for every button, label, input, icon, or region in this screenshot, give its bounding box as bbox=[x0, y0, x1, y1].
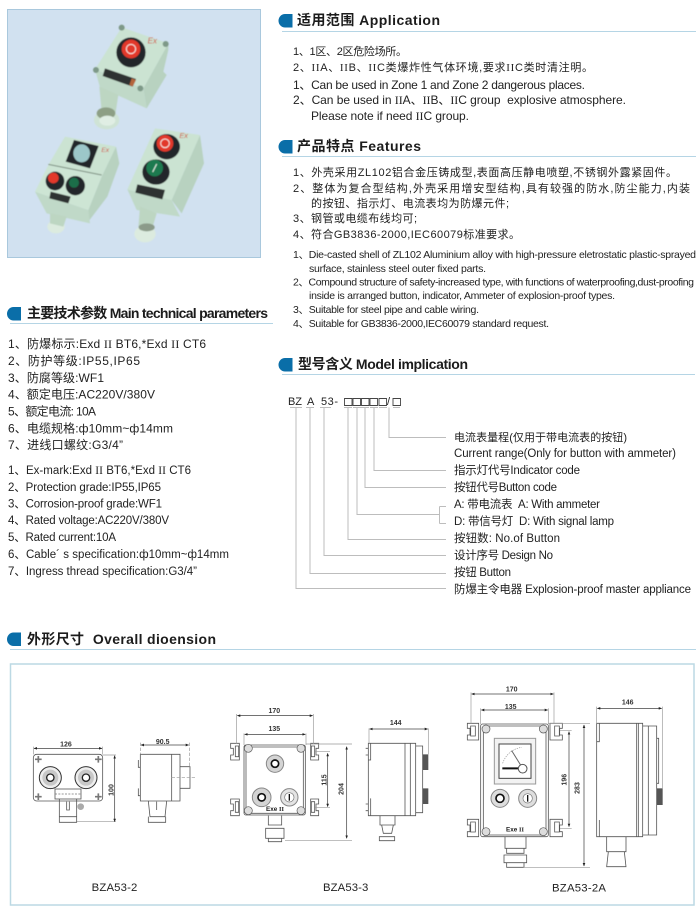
code labels: 防爆主令电器 Explosion-proof master appliance bbox=[454, 582, 691, 596]
front view: 170 bbox=[269, 708, 280, 715]
text block: parameters english: 7、Ingress thread specification:G3/4” bbox=[8, 566, 197, 578]
icon: double button enclosure: Ex bbox=[179, 131, 188, 140]
text block: parameters chinese: 7、进线口螺纹:G3/4” bbox=[8, 438, 123, 452]
front view: 170 bbox=[506, 687, 518, 694]
panel: product photo bbox=[8, 10, 260, 258]
code labels: 设计序号 Design No bbox=[454, 548, 553, 562]
icon: double button enclosure bbox=[127, 128, 204, 242]
side view: 146 bbox=[622, 699, 634, 706]
text block: parameters english: 2、Protection grade:IP55,IP65 bbox=[8, 482, 161, 494]
diagram: model code breakdown bbox=[288, 396, 691, 596]
drawing: BZA53-3 bbox=[231, 708, 428, 894]
model code bbox=[288, 396, 400, 408]
caption: BZA53-2 bbox=[92, 882, 137, 894]
side view: 90.5 bbox=[156, 739, 170, 746]
text block: features english: inside is arranged button, indicator, Ammeter of explosion-proof types. bbox=[309, 290, 615, 302]
text block: parameters english: 1、Ex-mark:Exd II BT6,*Exd II CT6 bbox=[8, 465, 191, 477]
front view bbox=[467, 687, 590, 867]
caption: BZA53-2A bbox=[552, 883, 606, 895]
text block: features chinese: 的按钮、指示灯、电流表均为防爆元件; bbox=[311, 196, 509, 210]
text block: parameters chinese: 6、电缆规格:ф10mm~ф14mm bbox=[8, 420, 173, 436]
text block: application list bbox=[293, 44, 626, 123]
text block: features english: 1、Die-casted shell of ZL102 Aluminium alloy with high-pressure eletrostatic plastic-sprayed bbox=[293, 249, 696, 261]
model code: BZ bbox=[288, 396, 302, 408]
heading: model implication bbox=[278, 356, 695, 374]
front view: Exe II bbox=[506, 826, 525, 833]
front view: 100 bbox=[109, 784, 116, 796]
side view bbox=[138, 739, 195, 822]
heading: main technical parameters: 主要技术参数 Main technical parameters bbox=[27, 305, 268, 321]
front view: Exe II bbox=[266, 806, 285, 813]
text block: parameters english: 6、Cable´ s specification:ф10mm~ф14mm bbox=[8, 549, 229, 561]
text block: features chinese bbox=[293, 165, 690, 241]
front view: 283 bbox=[574, 782, 581, 794]
code labels: Current range(Only for button with ammeter) bbox=[454, 448, 676, 460]
icon: single button enclosure: Ex bbox=[148, 36, 158, 45]
text block: application list: 2、IIA、IIB、IIC类爆炸性气体环境,要求IIC类时清注明。 bbox=[293, 60, 593, 74]
heading: overall dimension: 外形尺寸 Overall dioension bbox=[27, 631, 216, 647]
front view bbox=[231, 708, 352, 842]
icon: button enclosure with ammeter window: Ex bbox=[101, 147, 110, 154]
text block: features english bbox=[293, 249, 696, 330]
text block: application list: Please note if need IIC group. bbox=[311, 109, 469, 123]
code labels bbox=[454, 430, 691, 596]
text block: parameters chinese: 5、额定电流: 10A bbox=[8, 404, 96, 418]
text block: parameters english: 5、Rated current:10A bbox=[8, 532, 116, 544]
code labels: 电流表量程(仅用于带电流表的按钮) bbox=[454, 430, 627, 444]
icon: single button enclosure bbox=[93, 25, 169, 129]
panel: dimension drawings bbox=[10, 664, 694, 905]
model code: 53- bbox=[321, 396, 338, 408]
text block: features english: 3、Suitable for steel pipe and cable wiring. bbox=[293, 304, 479, 316]
model code: A bbox=[307, 396, 315, 408]
ammeter bbox=[494, 738, 536, 784]
text block: features chinese: 4、符合GB3836-2000,IEC60079标准要求。 bbox=[293, 227, 520, 241]
front view: 126 bbox=[60, 742, 72, 749]
text block: features chinese: 2、整体为复合型结构,外壳采用增安型结构,具有较强的防水,防尘能力,内装 bbox=[293, 181, 690, 195]
text block: parameters chinese: 1、防爆标示:Exd II BT6,*Exd II CT6 bbox=[8, 336, 206, 351]
caption: BZA53-3 bbox=[323, 882, 368, 894]
heading: features: 产品特点 Features bbox=[297, 138, 421, 154]
text block: features chinese: 3、钢管或电缆布线均可; bbox=[293, 211, 417, 225]
front view: 196 bbox=[562, 774, 569, 785]
side view bbox=[366, 720, 428, 841]
code labels: D: 带信号灯 D: With signal lamp bbox=[454, 515, 614, 528]
model code: / bbox=[387, 396, 391, 408]
code labels: 指示灯代号Indicator code bbox=[454, 463, 580, 477]
text block: parameters chinese: 3、防腐等级:WF1 bbox=[8, 370, 104, 385]
text block: application list: 1、Can be used in Zone 1 and Zone 2 dangerous places. bbox=[293, 78, 585, 92]
text block: parameters english: 4、Rated voltage:AC220V/380V bbox=[8, 515, 169, 527]
code labels: 按钮 Button bbox=[454, 565, 511, 579]
heading: overall dimension bbox=[7, 631, 696, 650]
front view: 204 bbox=[339, 783, 346, 795]
text block: parameters english: 3、Corrosion-proof grade:WF1 bbox=[8, 498, 162, 510]
code labels: 按钮数: No.of Button bbox=[454, 531, 560, 545]
text block: parameters english bbox=[8, 465, 229, 578]
text block: parameters chinese: 4、额定电压:AC220V/380V bbox=[8, 386, 155, 402]
heading: features bbox=[278, 138, 696, 156]
text block: features english: surface, stainless steel outer fixed parts. bbox=[309, 263, 486, 275]
heading: model implication: 型号含义 Model implication bbox=[298, 356, 468, 372]
icon: button enclosure with ammeter window bbox=[35, 137, 119, 233]
drawing: BZA53-2A bbox=[467, 687, 663, 895]
heading: application bbox=[278, 12, 696, 32]
text block: features english: 2、Compound structure of safety-increased type, with functions of waterproofing,dust-proofing bbox=[293, 276, 694, 288]
code labels: A: 带电流表 A: With ammeter bbox=[454, 497, 600, 511]
drawing: BZA53-2 bbox=[33, 739, 195, 894]
leader lines bbox=[290, 408, 446, 588]
text block: features chinese: 1、外壳采用ZL102铝合金压铸成型,表面高压静电喷塑,不锈钢外露紧固件。 bbox=[293, 165, 677, 179]
code labels: 按钮代号Button code bbox=[454, 480, 557, 494]
front view: 115 bbox=[321, 774, 328, 786]
front view bbox=[33, 742, 116, 822]
text block: features english: 4、Suitable for GB3836-2000,IEC60079 standard request. bbox=[293, 318, 549, 330]
text block: application list: 2、Can be used in IIA、IIB、IIC group explosive atmosphere. bbox=[293, 93, 626, 107]
front view: 135 bbox=[269, 726, 280, 733]
heading: application: 适用范围 Application bbox=[297, 12, 440, 28]
side view: 144 bbox=[390, 720, 402, 727]
side view bbox=[597, 699, 663, 867]
text block: parameters chinese: 2、防护等级:IP55,IP65 bbox=[8, 353, 140, 368]
text block: application list: 1、1区、2区危险场所。 bbox=[293, 44, 407, 58]
text block: parameters chinese bbox=[8, 336, 206, 452]
front view: 135 bbox=[505, 704, 517, 711]
